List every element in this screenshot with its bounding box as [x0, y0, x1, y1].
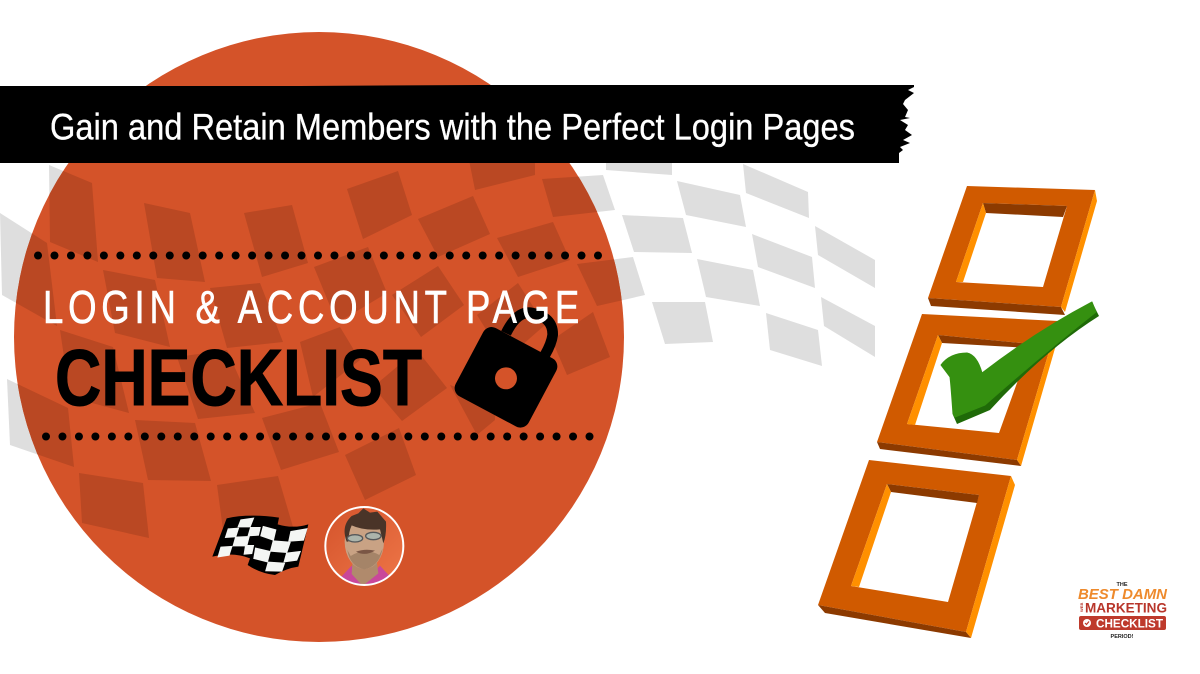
- padlock icon: [451, 313, 561, 431]
- heading: checklist: CHECKLIST: [55, 333, 422, 422]
- checkbox top: [928, 186, 1097, 315]
- logo: best damn web marketing checklist: BEST DAMN: [1078, 587, 1168, 603]
- portrait in round frame: [325, 507, 403, 597]
- logo: best damn web marketing checklist: THE: [1116, 582, 1128, 588]
- heading: login and account page: LOGIN & ACCOUNT PAGE: [43, 281, 584, 333]
- logo: best damn web marketing checklist: PERIOD!: [1111, 634, 1134, 640]
- checkbox bottom: [818, 460, 1015, 638]
- icon: three checkboxes: [818, 186, 1097, 638]
- bottom dotted divider: [46, 432, 590, 440]
- logo: best damn web marketing checklist: WEB: [1079, 603, 1084, 612]
- top dotted divider: [38, 252, 598, 260]
- logo: best damn web marketing checklist: MARKETING: [1085, 600, 1167, 616]
- checkered flag background pattern: [0, 150, 875, 538]
- top banner: [0, 85, 914, 163]
- banner title: Gain and Retain Members with the Perfect Login Pages: [50, 106, 855, 148]
- logo: best damn web marketing checklist: CHECKLIST: [1096, 616, 1164, 630]
- orange circle with dark flag squares: [14, 32, 624, 642]
- checkbox middle: [877, 314, 1060, 466]
- logo: best damn web marketing checklist: [1078, 582, 1168, 640]
- icon: green check mark: [941, 302, 1099, 424]
- icon: checkered racing flag: [212, 516, 308, 575]
